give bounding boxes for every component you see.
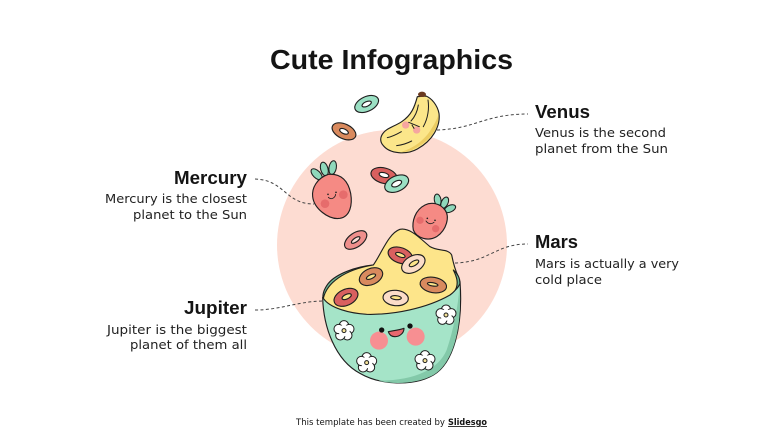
label: Mars: cold place — [535, 272, 602, 287]
back rim right — [453, 270, 460, 290]
icon: green cereal ring — [352, 92, 381, 116]
label: Mars — [535, 231, 680, 287]
label: Venus: planet from the Sun — [535, 141, 668, 156]
label: Mars: Mars is actually a very — [535, 256, 680, 271]
bowl shadow — [378, 287, 460, 383]
illustration: bowl of cereal — [323, 227, 461, 383]
illustration: falling fruit and cereal — [309, 92, 439, 218]
label: Mercury: Mercury — [174, 167, 248, 188]
label: Jupiter: planet of them all — [130, 337, 247, 352]
icon: green cereal ring 2 — [382, 171, 411, 196]
flower: bottom left — [357, 353, 377, 372]
background circle — [277, 130, 507, 360]
label: Venus — [535, 101, 668, 156]
flower: right — [436, 305, 456, 324]
label: Venus: Venus — [535, 101, 590, 122]
bowl body — [323, 282, 461, 383]
footer credit: This template has been created by — [295, 418, 445, 428]
label: Venus: Venus is the second — [535, 125, 666, 140]
connector: Jupiter — [255, 301, 322, 310]
title: Cute Infographics — [270, 44, 513, 75]
label: Jupiter — [106, 297, 247, 352]
pink cereal ring — [341, 227, 370, 253]
bowl face — [370, 323, 425, 350]
icon: strawberry on cereal — [413, 194, 457, 239]
label: Mercury: planet to the Sun — [133, 207, 247, 222]
label: Mars: Mars — [535, 231, 578, 252]
footer credit: Slidesgo — [448, 418, 487, 428]
connector: Venus — [437, 114, 528, 130]
cereal rings in bowl — [331, 244, 448, 310]
label: Mercury: Mercury is the closest — [105, 191, 247, 206]
back rim — [323, 265, 373, 300]
icon: orange cereal ring — [329, 119, 359, 143]
connector: Mercury — [255, 179, 314, 204]
label: Jupiter: Jupiter is the biggest — [106, 322, 247, 337]
icon: strawberry left — [309, 160, 351, 218]
label: Mercury — [105, 167, 248, 222]
connector: Mars — [455, 244, 528, 263]
icon: banana — [381, 92, 439, 153]
icon: red cereal ring — [369, 165, 399, 187]
flower: left — [334, 321, 354, 340]
flower: bottom right — [415, 351, 435, 370]
cereal milk — [323, 229, 459, 314]
label: Jupiter: Jupiter — [184, 297, 247, 318]
